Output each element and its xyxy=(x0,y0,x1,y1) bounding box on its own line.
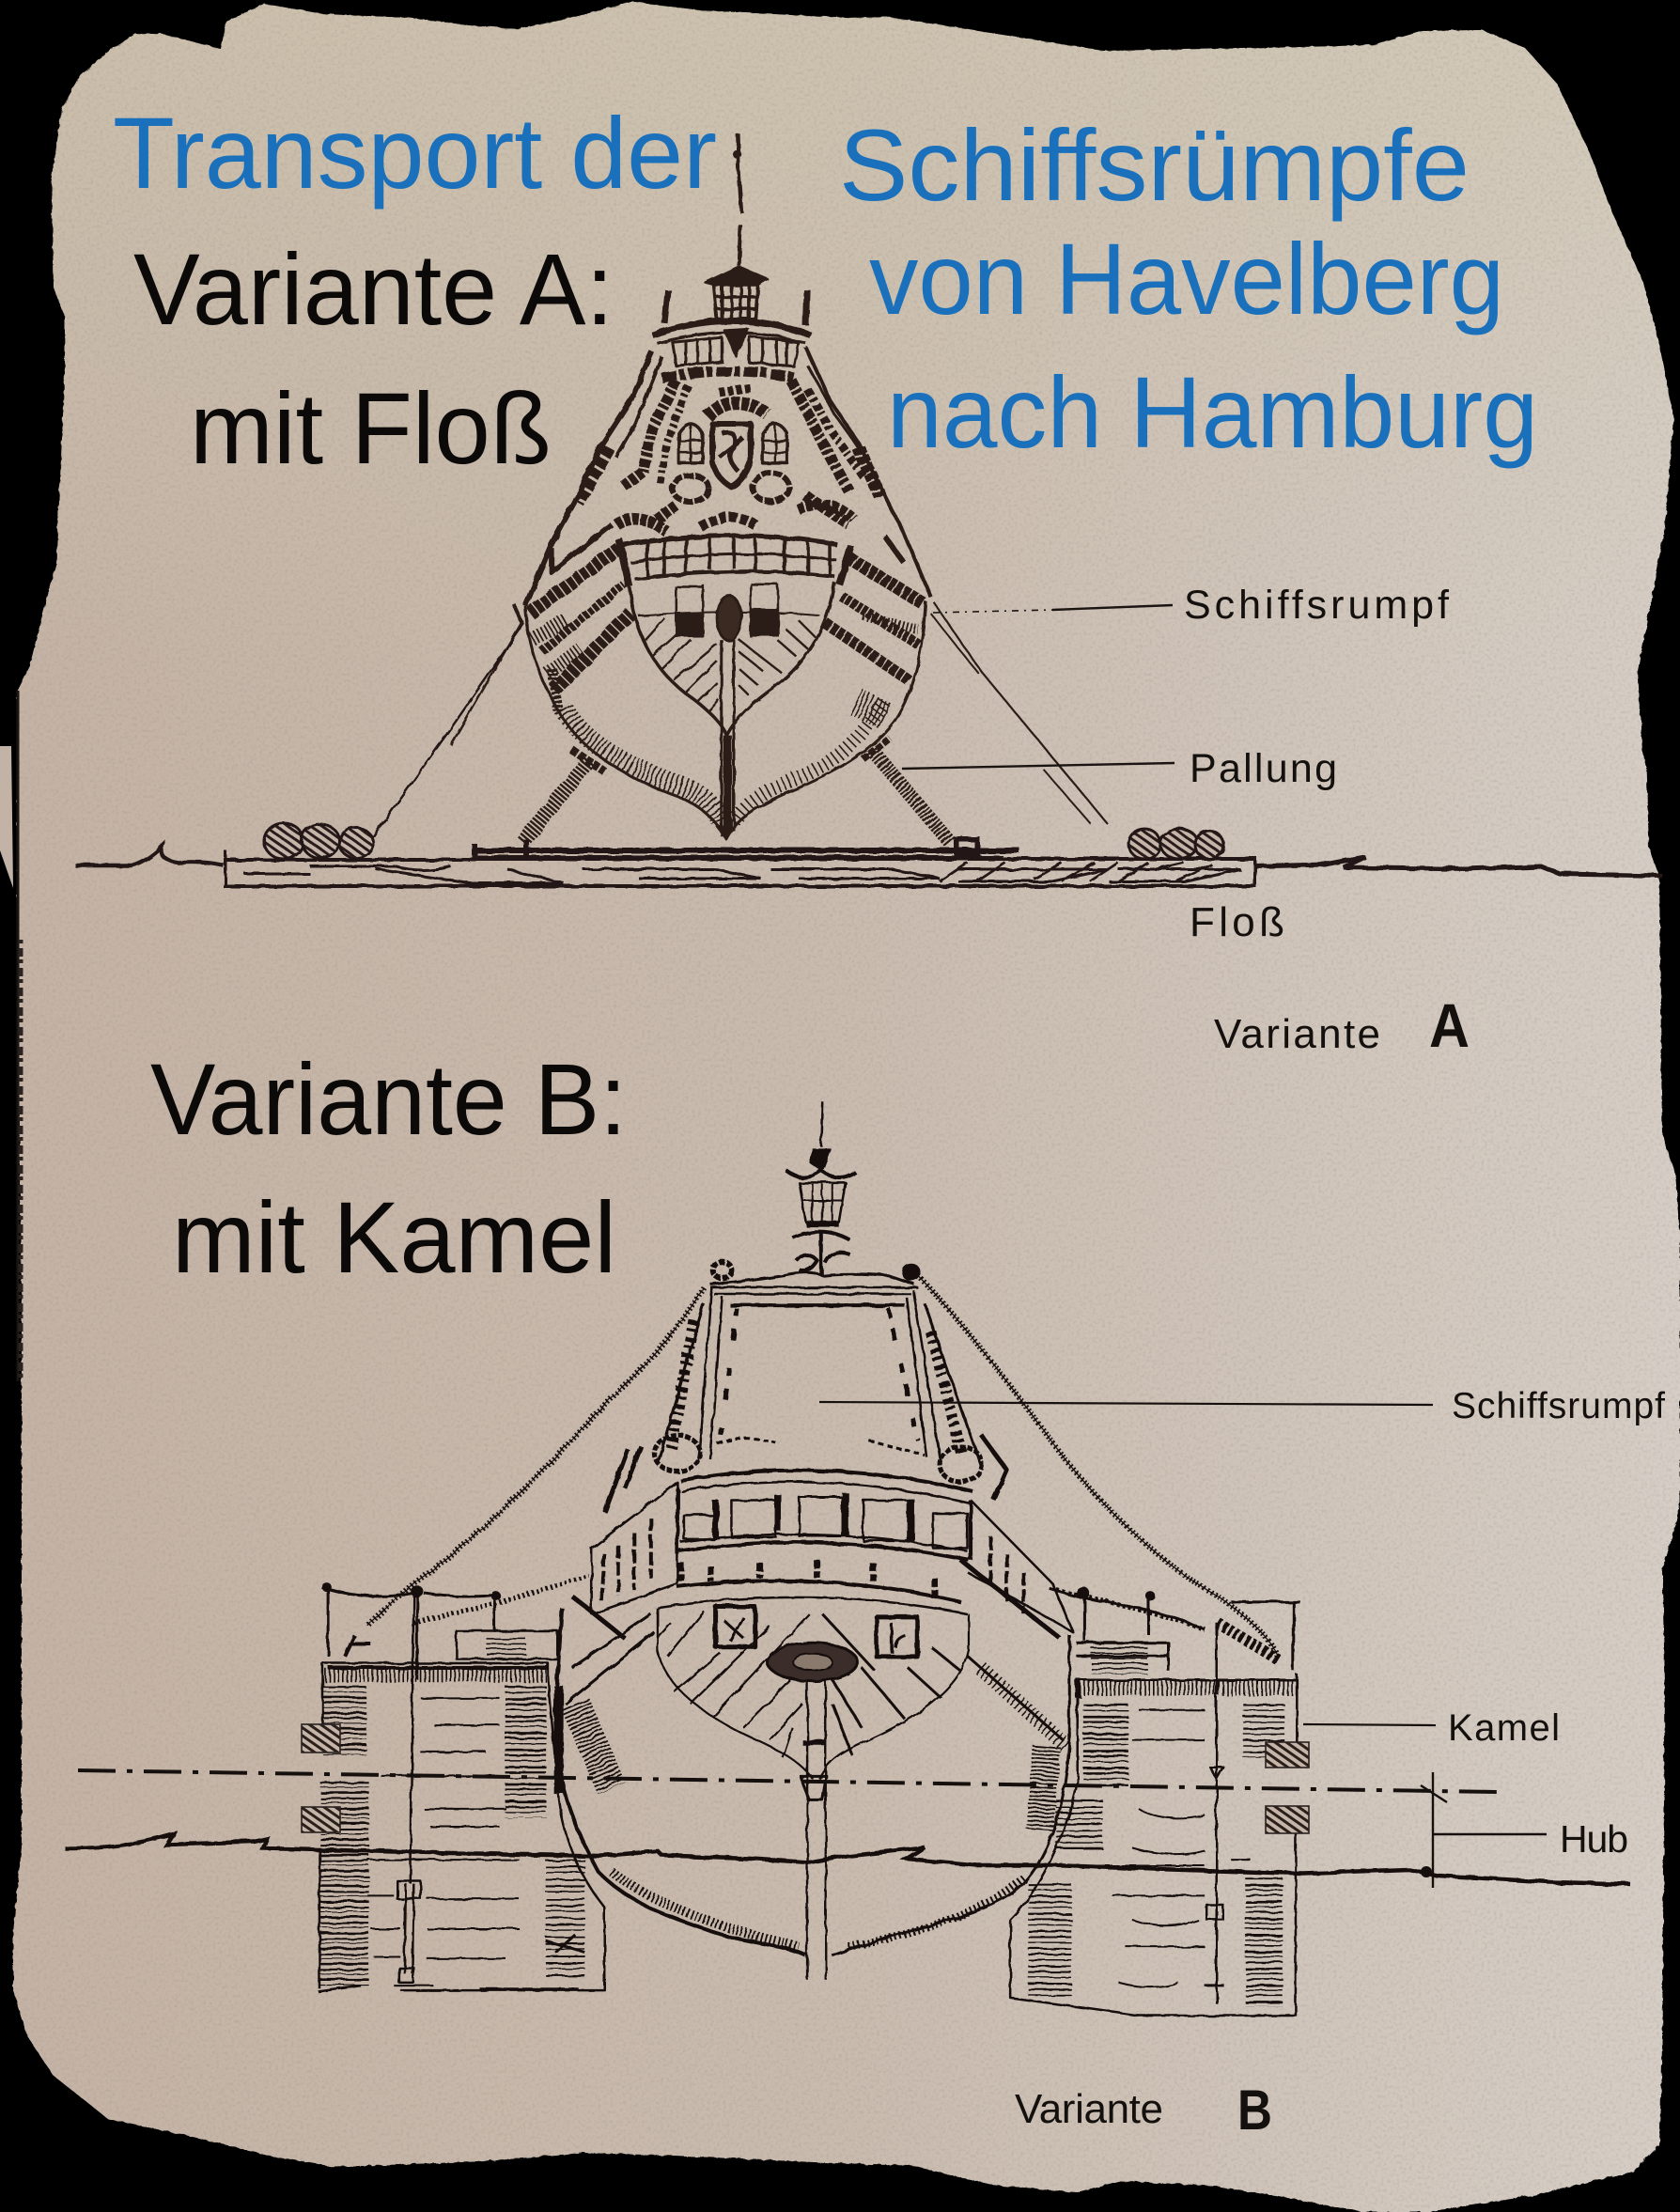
heading: Variante A: Variante A: xyxy=(133,232,614,346)
transom shield xyxy=(658,1597,969,1779)
label: Schiffsrumpf: Schiffsrumpf xyxy=(1452,1386,1665,1426)
top frame xyxy=(698,1262,941,1464)
wales xyxy=(530,538,924,690)
heading: mit Floß: mit Floß xyxy=(190,371,552,485)
logs left xyxy=(264,823,373,859)
label: Variante B xyxy=(1015,2079,1272,2142)
label: Schiffsrumpf: Schiffsrumpf xyxy=(1184,583,1450,628)
label: Floß: Floß xyxy=(1190,899,1284,945)
label: Variante A: Variante xyxy=(1214,1011,1380,1057)
line: lift dash-dot level xyxy=(78,1770,1498,1792)
label: Variante A xyxy=(1214,990,1470,1060)
railing xyxy=(624,533,837,580)
leader: Kamel xyxy=(1303,1724,1436,1725)
logs right xyxy=(1128,829,1223,859)
camel right xyxy=(1010,1588,1300,2016)
ropes xyxy=(451,601,1108,824)
upper gallery xyxy=(652,320,811,366)
label: Variante B: B xyxy=(1237,2079,1272,2142)
label: Hub: Hub xyxy=(1560,1817,1628,1861)
rope left xyxy=(372,624,523,837)
stern carving xyxy=(525,347,930,606)
label: Variante A: A xyxy=(1429,990,1470,1060)
title: Transport der: Transport der xyxy=(113,96,717,210)
rope right xyxy=(918,1275,1277,1656)
title: Schiffsrümpfe: Schiffsrümpfe xyxy=(839,108,1470,222)
illustration: ship hull with camels (Variante B) xyxy=(319,1101,1300,2016)
side galleries xyxy=(572,1482,1073,1638)
label: Kamel: Kamel xyxy=(1448,1707,1560,1749)
rope left xyxy=(367,1287,704,1626)
hatched blocks on camels xyxy=(302,1724,1309,1833)
leader: Schiffsrumpf B xyxy=(819,1402,1433,1405)
rudder xyxy=(717,640,735,840)
heading: Variante B: Variante B: xyxy=(150,1042,627,1156)
water line right xyxy=(1255,857,1662,876)
transom shield xyxy=(630,582,834,736)
heading: mit Kamel: mit Kamel xyxy=(172,1180,616,1294)
illustration: raft and water (Variante A) xyxy=(75,624,1662,888)
finial xyxy=(733,133,741,266)
camel left xyxy=(319,1583,605,1991)
side carving xyxy=(605,1303,1007,1512)
title: von Havelberg: von Havelberg xyxy=(869,222,1504,335)
lantern xyxy=(664,267,807,325)
raft deck beams xyxy=(474,839,1019,858)
props (Pallung) xyxy=(523,738,950,842)
illustration: ship hull on raft (Variante A) xyxy=(451,133,1108,842)
label: Variante B: Variante xyxy=(1015,2086,1163,2132)
lantern xyxy=(786,1101,855,1275)
raft xyxy=(224,850,1255,888)
water line left xyxy=(75,847,224,865)
leader lines Variante A xyxy=(902,605,1174,769)
title: nach Hamburg: nach Hamburg xyxy=(887,355,1538,469)
label: Pallung: Pallung xyxy=(1190,746,1337,791)
dimension: Hub xyxy=(1421,1772,1547,1888)
upper gallery xyxy=(677,1471,972,1602)
hull xyxy=(525,601,926,838)
line: water level Variante B xyxy=(65,1834,1630,1884)
hull xyxy=(555,1608,1069,1955)
rudder xyxy=(800,1680,826,1980)
